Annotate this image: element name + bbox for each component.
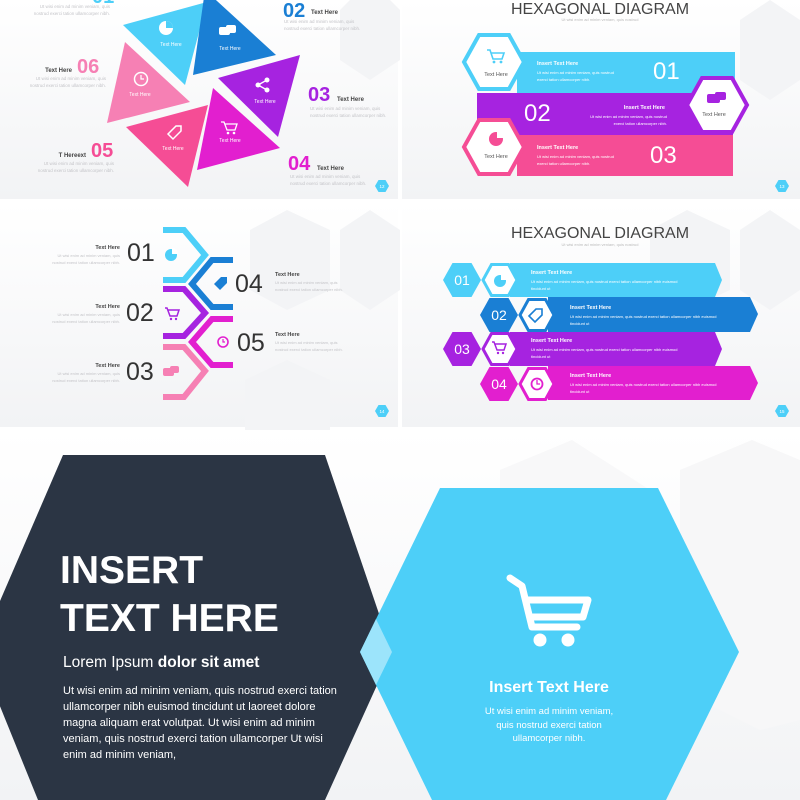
icon: pie (165, 249, 177, 261)
paragraph: enim ad minim veniam, (63, 749, 176, 761)
triangle light pink (107, 42, 190, 123)
label 04: nostrud exerci tation ullamcorper nibh. (290, 181, 366, 186)
chevron 02 (163, 289, 205, 336)
item 04: 04 (235, 270, 263, 298)
triangle light blue (123, 2, 207, 85)
paragraph (63, 685, 337, 761)
paragraph: magna aliquam erat volutpat. Ut wisi enim ad minim (63, 717, 315, 729)
headline (60, 549, 279, 640)
slide number 13 (775, 180, 789, 192)
bar 03: 03 (650, 142, 677, 169)
item 03 (52, 358, 154, 386)
label 02 (284, 3, 360, 31)
label 02: Ut wisi enim ad minim veniam, quis (284, 19, 355, 24)
item 02: 02 (126, 299, 154, 327)
triangle light pink: Text Here (129, 92, 151, 98)
bar 03: exerci tation ullamcorper nibh. (537, 161, 590, 166)
slide number 15: 15 (779, 409, 785, 414)
label 02: Text Here (311, 10, 339, 16)
icon: clock (218, 337, 228, 347)
label 05: nostrud exerci tation ullamcorper nibh. (38, 168, 114, 173)
label 05: 05 (91, 140, 113, 162)
label 01: nostrud exerci tation ullamcorper nibh. (34, 11, 110, 16)
bar 03: Ut wisi enim ad minim veniam, quis nostrud (537, 154, 614, 159)
label 01: Ut wisi enim ad minim veniam, quis (40, 4, 111, 9)
icon: cart (165, 308, 179, 320)
label 02: nostrud exerci tation ullamcorper nibh. (284, 26, 360, 31)
row 04: Insert Text Here (570, 373, 611, 379)
row 04: 04 (491, 376, 507, 392)
triangle light blue: Text Here (160, 42, 182, 48)
row 01: 01 (454, 272, 470, 288)
label 03 (308, 84, 386, 118)
item 01: 01 (127, 239, 155, 267)
label 06: nostrud exerci tation ullamcorper nibh. (30, 83, 106, 88)
label 04: Text Here (317, 166, 345, 172)
chevron 05 (192, 319, 233, 365)
bar 02: exerci tation ullamcorper nibh. (614, 121, 667, 126)
slide 13 background (402, 0, 800, 199)
label 06 (30, 59, 106, 88)
row 02: Ut wisi enim ad minim veniam, quis nostrud exerci tation ullamcorper nibh euismod (570, 314, 717, 319)
panel: hexagon chevrons (slide 14) (52, 230, 389, 417)
icon: chat (163, 366, 179, 376)
paragraph: ullamcorper nibh euismod tincidunt ut laoreet dolore (63, 701, 316, 713)
item 05: Text Here (275, 332, 300, 338)
item 04: Text Here (275, 272, 300, 278)
hex icon: pie (464, 120, 524, 174)
bar 02: Insert Text Here (624, 105, 665, 111)
subheading: Lorem Ipsum dolor sit amet (63, 654, 259, 671)
row 01 (443, 263, 722, 297)
label 03: Ut wisi enim ad minim veniam, quis (310, 106, 381, 111)
label 03: Text Here (337, 97, 365, 103)
label 03: 03 (308, 84, 330, 106)
icon: tag (214, 277, 227, 290)
chevron 04 (192, 260, 233, 307)
panel: hexagonal diagram bars (slide 13) (464, 1, 789, 192)
item 04 (235, 270, 343, 298)
hex icon: chat: Text Here (702, 112, 726, 118)
row 04 (480, 366, 758, 401)
item 02 (52, 303, 153, 324)
chevron 01 (163, 230, 205, 280)
label 06: Text Here (45, 68, 73, 74)
item 04: Ut wisi enim ad minim veniam, quis (275, 280, 337, 285)
icon: cart (510, 578, 588, 643)
row 04: tincidunt ut (570, 389, 590, 394)
bar 03: Insert Text Here (537, 145, 578, 151)
triangle hot pink: Text Here (162, 146, 184, 152)
label 05: Ut wisi enim ad minim veniam, quis (44, 161, 115, 166)
hex icon: pie: Text Here (484, 154, 508, 160)
label 06: 06 (77, 56, 99, 78)
label 03: nostrud exerci tation ullamcorper nibh. (310, 113, 386, 118)
bar 03 (517, 135, 733, 176)
blue hexagon with cart: Ut wisi enim ad minim veniam, (485, 706, 613, 717)
item 01: Ut wisi enim ad minim veniam, quis (58, 253, 120, 258)
panel: triangle pinwheel (slide 12) (30, 0, 389, 192)
triangle hot pink (126, 105, 208, 187)
item 03: 03 (126, 358, 154, 386)
bar 01: 01 (653, 58, 680, 85)
panel: hexagonal diagram rows (slide 15) (443, 225, 789, 417)
slide number 12 (375, 180, 389, 192)
label 04: Ut wisi enim ad minim veniam, quis (290, 174, 361, 179)
label 04: 04 (288, 153, 311, 175)
blue hexagon with cart (360, 488, 739, 800)
blue hexagon with cart: quis nostrud exerci tation (496, 720, 602, 731)
slide number 12: 12 (379, 184, 385, 189)
caption: Insert Text Here (489, 679, 609, 696)
slide 12 background (0, 0, 400, 199)
triangle purple: Text Here (254, 99, 276, 105)
row 03: Insert Text Here (531, 338, 572, 344)
row 04: Ut wisi enim ad minim veniam, quis nostrud exerci tation ullamcorper nibh euismod (570, 382, 717, 387)
bar 02: 02 (524, 100, 551, 127)
item 05 (237, 329, 343, 357)
triangle dark blue: Text Here (219, 46, 241, 52)
row 02: Insert Text Here (570, 305, 611, 311)
row 01: tincidunt ut (531, 286, 551, 291)
triangle dark blue (193, 0, 276, 75)
slide 14 background (0, 203, 400, 430)
slide 15 background (402, 203, 800, 427)
slide number 14: 14 (379, 409, 385, 414)
row 03: Ut wisi enim ad minim veniam, quis nostrud exerci tation ullamcorper nibh euismod (531, 347, 678, 352)
item 02: nostrud exerci tation ullamcorper nibh. (52, 319, 120, 324)
row 01: Insert Text Here (531, 270, 572, 276)
row 03: tincidunt ut (531, 354, 551, 359)
hex icon: cart (464, 35, 524, 89)
label 05: T Hereext (59, 153, 86, 159)
row 02: 02 (491, 307, 507, 323)
label 02: 02 (283, 0, 305, 22)
item 04: nostrud exerci tation ullamcorper nibh. (275, 287, 343, 292)
bar 01 (517, 52, 735, 93)
bar 01: Insert Text Here (537, 61, 578, 67)
item 03: Ut wisi enim ad minim veniam, quis (58, 371, 120, 376)
item 03: nostrud exerci tation ullamcorper nibh. (52, 378, 120, 383)
slide number 15 (775, 405, 789, 417)
row 02 (480, 297, 758, 332)
item 03: Text Here (95, 363, 120, 369)
chevron 03 (163, 347, 205, 397)
headline: TEXT HERE (60, 597, 279, 640)
item 05: nostrud exerci tation ullamcorper nibh. (275, 347, 343, 352)
item 01 (52, 243, 154, 265)
triangle purple (218, 55, 300, 137)
label 06: Ut wisi enim ad minim veniam, quis (36, 76, 107, 81)
row 03 (443, 332, 722, 366)
paragraph: Ut wisi enim ad minim veniam, quis nostrud exerci tation (63, 685, 337, 697)
hex icon: cart: Text Here (484, 72, 508, 78)
item 05: Ut wisi enim ad minim veniam, quis (275, 340, 337, 345)
paragraph: veniam, quis nostrud exerci tation ullamcorper Ut wisi (63, 733, 323, 745)
bar 02: Ut wisi enim ad minim veniam, quis nostrud (590, 114, 667, 119)
item 02: Ut wisi enim ad minim veniam, quis (58, 312, 120, 317)
item 02: Text Here (95, 304, 120, 310)
bar 01: exerci tation ullamcorper nibh. (537, 77, 590, 82)
row 01: Ut wisi enim ad minim veniam, quis nostrud exerci tation ullamcorper nibh euismod (531, 279, 678, 284)
title: HEXAGONAL DIAGRAM (511, 225, 689, 242)
title: Ut wisi enim ad minim veniam, quis nostrud (562, 242, 638, 247)
label 04 (288, 156, 366, 186)
headline: INSERT (60, 549, 203, 592)
item 01: Text Here (95, 245, 120, 251)
title: Ut wisi enim ad minim veniam, quis nostrud (562, 17, 638, 22)
slide number 13: 13 (779, 184, 785, 189)
slide number 14 (375, 405, 389, 417)
label 05 (38, 143, 114, 173)
blue hexagon with cart: ullamcorper nibh. (513, 733, 585, 744)
bar 01: Ut wisi enim ad minim veniam, quis nostrud (537, 70, 614, 75)
triangle magenta: Text Here (219, 138, 241, 144)
dark hexagon with text (0, 455, 392, 800)
item 01: nostrud exerci tation ullamcorper nibh. (52, 260, 120, 265)
row 02: tincidunt ut (570, 321, 590, 326)
bar 02 (477, 93, 733, 135)
triangle magenta (197, 88, 280, 170)
row 03: 03 (454, 341, 470, 357)
item 05: 05 (237, 329, 265, 357)
hex icon: chat (687, 78, 747, 132)
label 01 (34, 0, 114, 16)
background (0, 430, 800, 800)
panel: bottom hero slide (0, 430, 800, 800)
title: HEXAGONAL DIAGRAM (511, 1, 689, 18)
